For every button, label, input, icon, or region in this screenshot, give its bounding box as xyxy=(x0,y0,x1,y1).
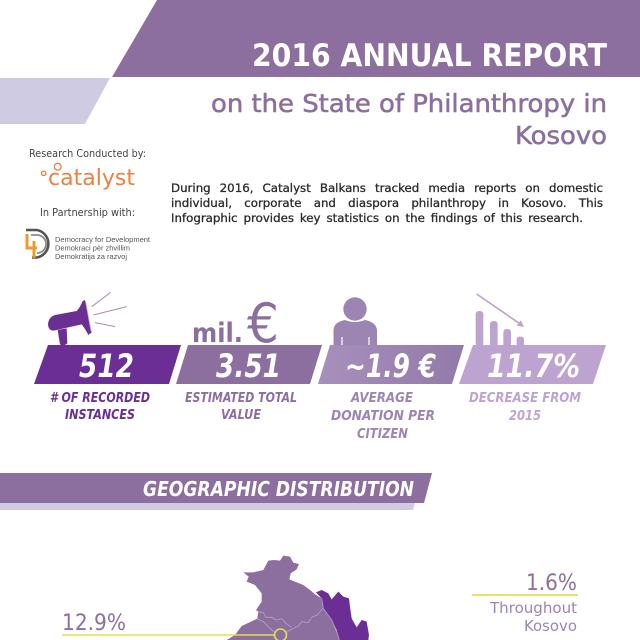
subtitle xyxy=(211,89,607,150)
democracy for development logo: Demokratija za razvoj xyxy=(55,252,127,261)
header accent band xyxy=(0,78,110,124)
subtitle: on the State of Philanthropy in xyxy=(211,89,607,118)
icon: million euro: € xyxy=(247,292,279,355)
intro paragraph: individual, corporate and diaspora philanthropy in Kosovo. This xyxy=(171,196,603,210)
stat: recorded instances: INSTANCES xyxy=(65,407,135,423)
intro paragraph: During 2016, Catalyst Balkans tracked media reports on domestic xyxy=(171,180,603,194)
stat: average donation per citizen: ~1.9 € xyxy=(345,347,436,385)
callout: 1.6% throughout Kosovo: Throughout xyxy=(489,599,577,617)
section heading: GEOGRAPHIC DISTRIBUTION xyxy=(143,477,414,501)
callout: 12.9% xyxy=(62,611,286,640)
section band xyxy=(0,473,432,503)
democracy for development logo: Demokraci për zhvillim xyxy=(55,244,130,252)
callout: 1.6% throughout Kosovo: Kosovo xyxy=(524,617,577,635)
callout: 1.6% throughout Kosovo xyxy=(472,571,578,635)
stat: decrease from 2015: 2015 xyxy=(509,408,541,424)
in partnership with label: In Partnership with: xyxy=(40,207,135,219)
stat: estimated total value: ESTIMATED TOTAL xyxy=(185,390,297,406)
catalyst logo: catalyst xyxy=(48,166,135,191)
icon: megaphone xyxy=(48,292,127,345)
icon: decreasing bars xyxy=(476,294,524,345)
callout: 1.6% throughout Kosovo: 1.6% xyxy=(526,571,577,596)
intro paragraph xyxy=(171,180,603,225)
map of Kosovo xyxy=(227,556,369,640)
stat: decrease from 2015: DECREASE FROM xyxy=(469,390,581,406)
icon: million euro xyxy=(192,292,279,355)
intro paragraph: Infographic provides key statistics on the findings of this research. xyxy=(171,211,583,225)
research conducted by label: Research Conducted by: xyxy=(29,148,146,160)
democracy for development logo: Democracy for Development xyxy=(55,235,150,244)
icon: million euro: mil. xyxy=(192,318,243,349)
stat: average donation per citizen: AVERAGE xyxy=(350,390,414,406)
stat: average donation per citizen: CITIZEN xyxy=(357,426,408,442)
stat: decrease from 2015: 11.7% xyxy=(487,347,580,385)
subtitle: Kosovo xyxy=(515,121,607,150)
stat: recorded instances: # OF RECORDED xyxy=(50,390,150,406)
title: 2016 ANNUAL REPORT xyxy=(252,38,607,74)
stat: estimated total value: VALUE xyxy=(221,407,262,423)
stat: recorded instances: 512 xyxy=(79,347,134,385)
header band xyxy=(112,0,640,77)
stat: average donation per citizen: DONATION PER xyxy=(331,408,435,424)
stat: average donation per citizen xyxy=(318,345,464,442)
stat: decrease from 2015 xyxy=(459,345,606,424)
callout: 12.9%: 12.9% xyxy=(62,611,126,636)
stat: estimated total value xyxy=(176,345,322,423)
stat: recorded instances xyxy=(34,345,181,423)
stat: estimated total value: 3.51 xyxy=(216,347,281,385)
section band shadow xyxy=(0,503,415,510)
democracy for development logo xyxy=(26,230,150,261)
icon: person xyxy=(334,297,377,346)
